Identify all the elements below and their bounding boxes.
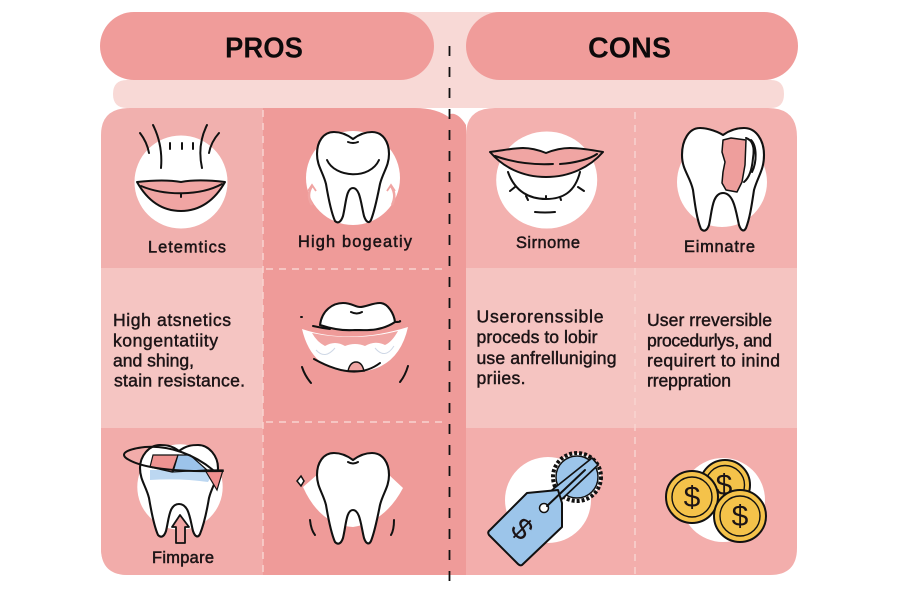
text: cons description left xyxy=(476,306,616,388)
text: cons description right: requirert to inind xyxy=(647,350,780,370)
heading: CONS xyxy=(466,12,798,80)
label: Fimpare: Fimpare xyxy=(152,549,214,567)
icon: price tag: $ xyxy=(504,512,539,547)
text: pros description: High atsnetics xyxy=(113,310,231,330)
panel: pros xyxy=(101,108,450,575)
text: cons description left: priies. xyxy=(476,368,526,388)
heading: CONS: CONS xyxy=(588,32,671,64)
text: cons description right: rreppration xyxy=(647,370,731,390)
panel: cons xyxy=(450,108,797,575)
text: pros description: and shing, xyxy=(113,350,194,370)
center divider xyxy=(448,46,450,584)
text: pros description: kongentatiity xyxy=(113,330,218,350)
label: High bogeatiy: High bogeatiy xyxy=(298,233,413,251)
backdrop band xyxy=(113,12,784,108)
icon: smile with teeth xyxy=(301,303,408,383)
icon: gold coins: $ xyxy=(684,481,701,514)
label: Eimnatre: Eimnatre xyxy=(684,238,755,256)
label: Sirnome: Sirnome xyxy=(516,234,580,252)
text: cons description right: User rreversible xyxy=(647,310,772,330)
icon: decayed tooth xyxy=(677,128,767,231)
heading: PROS: PROS xyxy=(225,32,303,64)
text: pros description: stain resistance. xyxy=(114,370,245,390)
icon: lips with lines xyxy=(134,125,228,228)
text: cons description left: Userorenssible xyxy=(476,306,604,326)
icon: gold coins: $ xyxy=(732,500,749,533)
heading: PROS xyxy=(100,12,434,80)
icon: smiling tooth xyxy=(306,131,400,225)
text: cons description left: proceds to lobir xyxy=(476,327,598,347)
text: cons description right xyxy=(647,310,780,390)
icon: lips over chin xyxy=(490,132,603,228)
icon: tooth with floss xyxy=(124,444,223,543)
icon: price tag xyxy=(488,453,601,565)
icon: gold coins xyxy=(666,458,766,542)
text: pros description xyxy=(113,310,245,390)
text: cons description right: procedurlys, and xyxy=(647,330,772,350)
icon: clean tooth with sparkle xyxy=(297,453,403,544)
text: cons description left: use anfrelluniging xyxy=(476,348,616,368)
icon: gold coins: $ xyxy=(716,469,733,502)
label: Letemtics: Letemtics xyxy=(148,238,226,256)
